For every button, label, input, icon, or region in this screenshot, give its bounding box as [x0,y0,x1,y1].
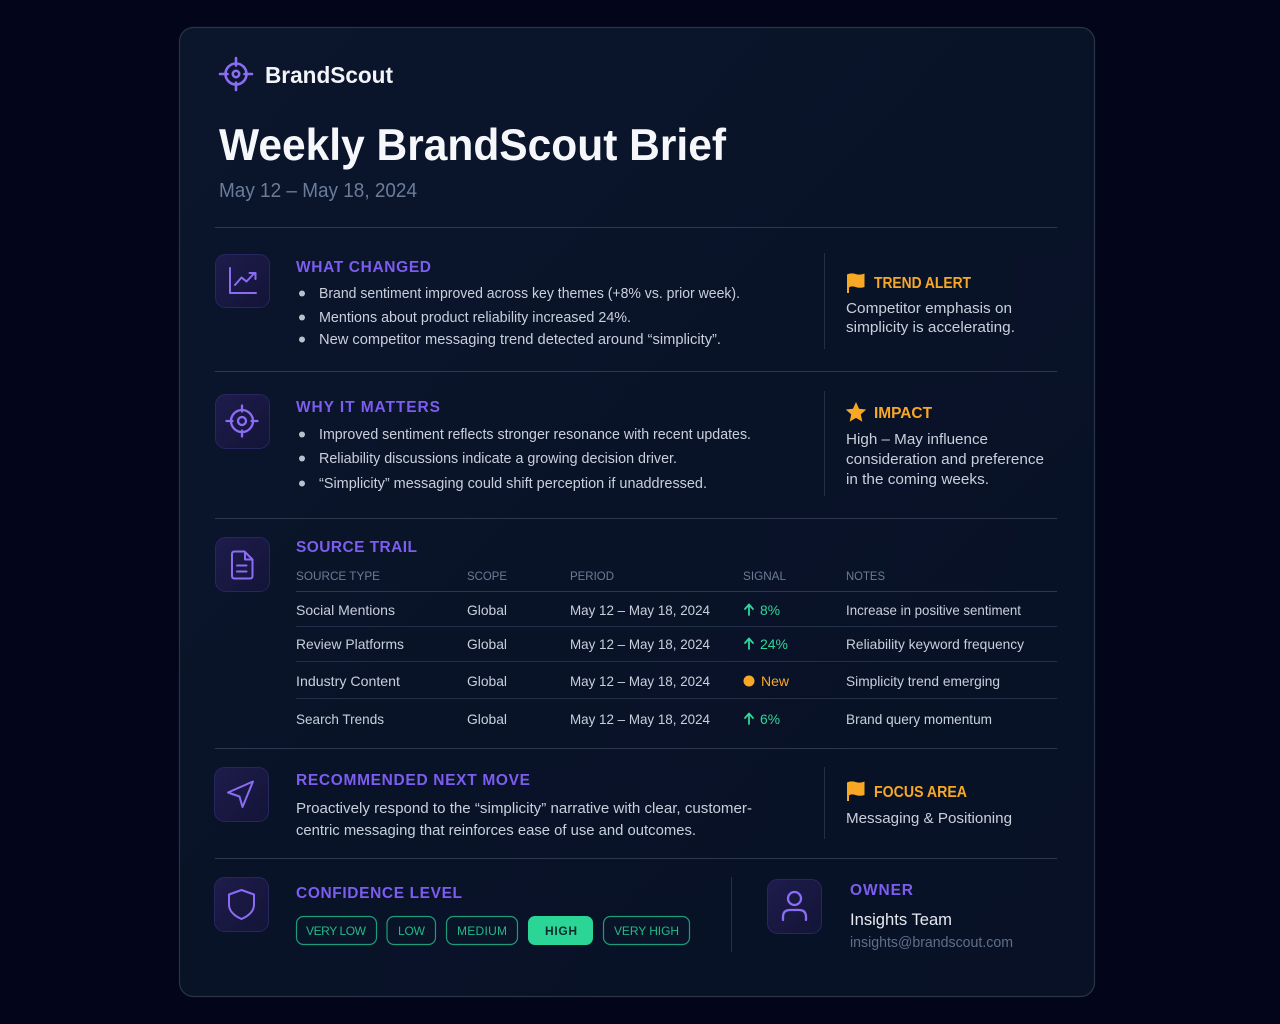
owner name: Insights Team [850,910,952,929]
row: industry content: Industry Content [296,673,400,689]
callout text: in the coming weeks. [846,471,989,488]
callout text [846,300,1015,336]
section: owner [768,880,1013,951]
pill: very high: VERY HIGH [614,924,679,938]
table header: PERIOD [570,569,614,583]
icon: document [216,538,270,592]
section: source trail [216,538,1057,727]
icon: target [216,394,270,448]
icon: navigation arrow [214,768,268,822]
heading: why it matters: WHY IT MATTERS [296,399,440,416]
table: sources [296,569,1057,727]
callout: focus area [846,781,1012,827]
label: trend alert: TREND ALERT [874,275,971,292]
pill: high, selected [528,916,593,945]
recommendation text [296,800,752,839]
pill: low [387,916,436,944]
row: search trends: Brand query momentum [846,711,992,727]
row: review platforms [296,636,1024,652]
table header [296,569,885,583]
row: search trends: Search Trends [296,711,384,727]
bullet list: “Simplicity” messaging could shift perception if unaddressed. [319,476,707,492]
focus text: Messaging & Positioning [846,810,1012,827]
callout text: simplicity is accelerating. [846,319,1015,336]
title: Weekly BrandScout Brief [219,121,726,170]
heading: confidence level: CONFIDENCE LEVEL [296,885,462,902]
bullet list: Improved sentiment reflects stronger resonance with recent updates. [319,427,751,443]
callout text: High – May influence [846,431,988,448]
icon: flag [847,781,864,801]
row: search trends: May 12 – May 18, 2024 [570,711,710,727]
bullet list [299,427,751,492]
table header: NOTES [846,569,885,583]
row: industry content: May 12 – May 18, 2024 [570,673,710,689]
recommendation text: centric messaging that reinforces ease of use and outcomes. [296,822,696,839]
heading: what changed: WHAT CHANGED [296,259,431,276]
callout: trend alert [846,273,1015,336]
pill: medium [446,916,518,944]
pill: medium: MEDIUM [457,924,507,938]
section: recommended next move [214,768,752,839]
row: social mentions: Global [467,602,507,618]
row: review platforms: Review Platforms [296,636,404,652]
bullet list: New competitor messaging trend detected around “simplicity”. [319,332,721,348]
heading: recommended next move: RECOMMENDED NEXT MOVE [296,772,530,789]
row: review platforms: 24% [760,636,788,652]
row: review platforms: Reliability keyword frequency [846,636,1024,652]
pill: very high [604,916,690,944]
row: industry content [296,673,1000,689]
row: social mentions [296,602,1021,618]
icon: crosshair logo [220,58,252,90]
owner email: insights@brandscout.com [850,935,1013,951]
label: impact: IMPACT [874,405,933,422]
bullet list: Brand sentiment improved across key themes (+8% vs. prior week). [319,286,740,302]
icon: flag [847,273,864,293]
row: review platforms: Global [467,636,507,652]
pill: very low [296,916,376,944]
icon: person [768,880,822,934]
row: social mentions: May 12 – May 18, 2024 [570,602,710,618]
row: industry content: Global [467,673,507,689]
pill: low: LOW [398,924,426,938]
row: social mentions: 8% [760,602,780,618]
row: search trends [296,711,992,727]
callout text: Competitor emphasis on [846,300,1012,317]
section: confidence level [214,878,690,945]
brand logo [220,58,393,90]
row: search trends: 6% [760,711,780,727]
row: review platforms: May 12 – May 18, 2024 [570,636,710,652]
table header: SOURCE TYPE [296,569,380,583]
brand name: BrandScout [265,62,393,88]
section: what changed [216,254,740,348]
row: industry content: Simplicity trend emerging [846,673,1000,689]
callout text: consideration and preference [846,451,1044,468]
heading: source trail: SOURCE TRAIL [296,539,417,556]
icon: star [846,402,866,422]
bullet list: Reliability discussions indicate a growing decision driver. [319,451,677,467]
date range: May 12 – May 18, 2024 [219,180,417,202]
bullet list: Mentions about product reliability increased 24%. [319,310,631,326]
table header: SIGNAL [743,569,786,583]
bullet list [299,286,740,348]
row: search trends: Global [467,711,507,727]
recommendation text: Proactively respond to the “simplicity” narrative with clear, customer- [296,800,752,817]
row: industry content: New [761,673,790,689]
heading: owner: OWNER [850,882,913,899]
callout text [846,431,1044,488]
panel: brief card [180,28,1094,996]
icon: line chart [216,254,270,308]
table header: SCOPE [467,569,507,583]
icon: shield [214,878,268,932]
row: social mentions: Social Mentions [296,602,395,618]
confidence scale [296,916,690,945]
label: focus area: FOCUS AREA [874,784,967,801]
pill: very low: VERY LOW [306,924,367,938]
callout: impact [846,402,1044,488]
section: why it matters [216,394,751,492]
pill: high, selected: HIGH [545,924,577,938]
row: social mentions: Increase in positive sentiment [846,602,1021,618]
